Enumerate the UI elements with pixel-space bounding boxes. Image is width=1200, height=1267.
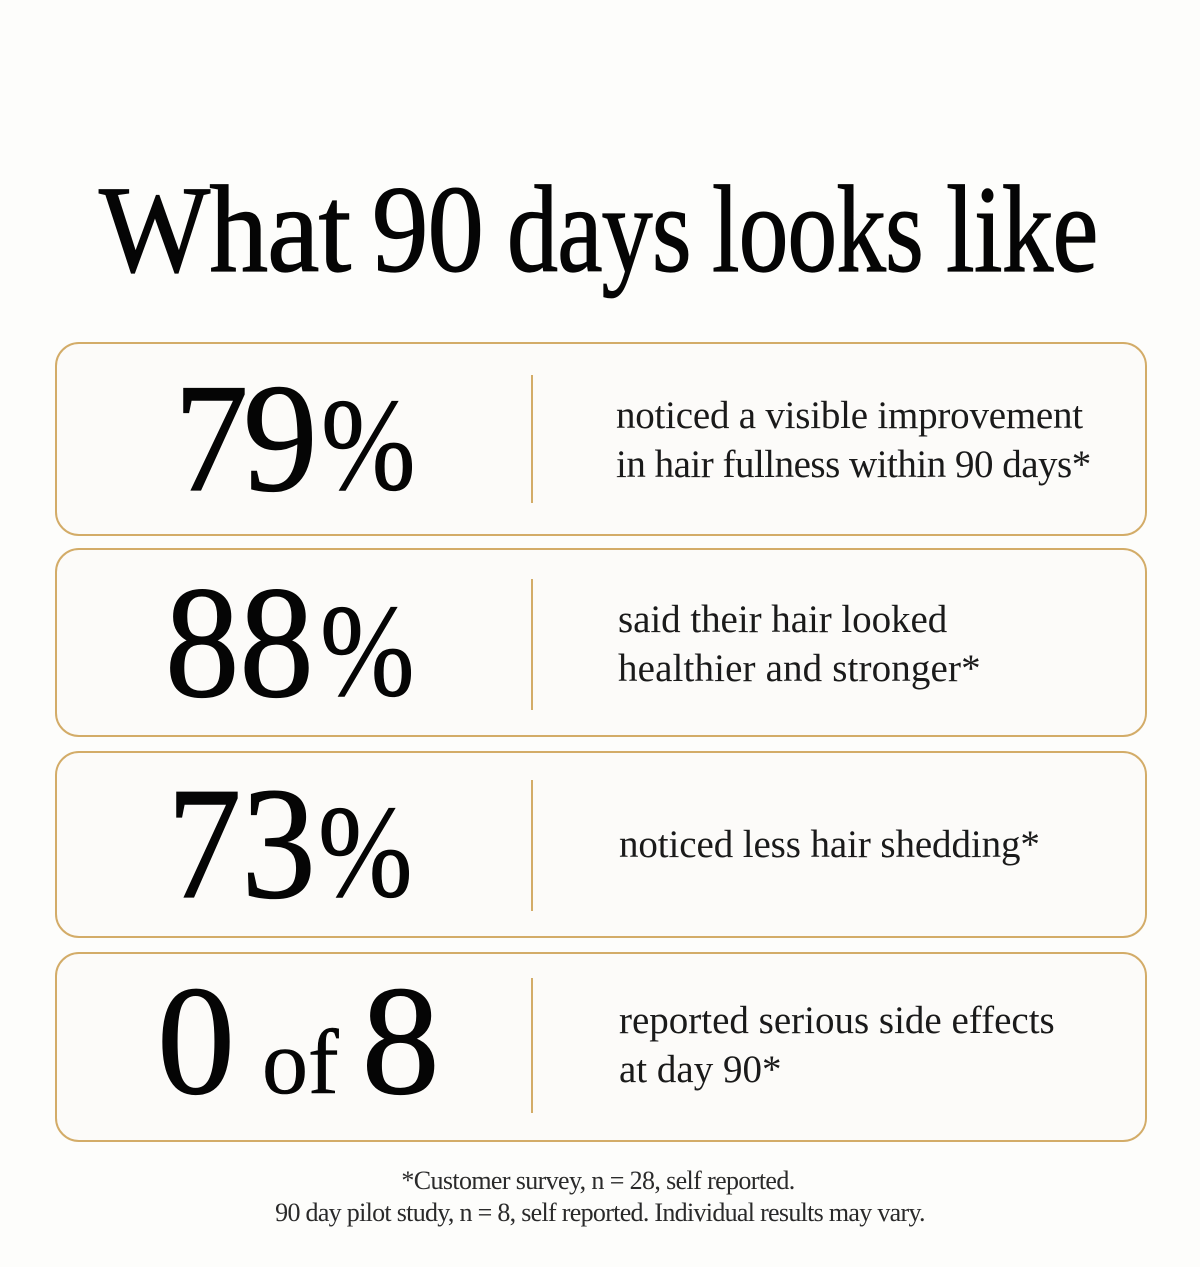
- title: [98, 161, 1098, 298]
- description: healthier: healthier and stronger*: [618, 647, 981, 690]
- footnote: [275, 1166, 925, 1227]
- description: fullness: [616, 394, 1091, 486]
- title: days: [507, 161, 691, 298]
- title: like: [946, 161, 1098, 298]
- panel: 88% stat: [55, 548, 1147, 737]
- description: side effects: [619, 999, 1055, 1091]
- panel: 79% stat: [55, 342, 1147, 536]
- stat: 79%: [174, 352, 416, 524]
- description: healthier: said their hair looked: [618, 598, 947, 641]
- title: 90: [372, 161, 483, 298]
- footnote: 90 day pilot study, n = 8, self reported. Individual results may vary.: [275, 1198, 925, 1227]
- stat: 73%: [167, 754, 413, 932]
- title: looks: [712, 161, 923, 298]
- stat: 0 of 8: 0 of8: [157, 954, 440, 1127]
- description: fullness: in hair fullness within 90 days*: [616, 443, 1091, 486]
- panel: 0 of 8 stat: [55, 952, 1147, 1142]
- stat: 88%: [165, 553, 415, 731]
- stat: 88%: %: [320, 577, 415, 724]
- panel: 73% stat: [55, 751, 1147, 938]
- description: fullness: noticed a visible improvement: [616, 394, 1083, 437]
- description: healthier: [618, 598, 981, 690]
- stat: 79%: %: [321, 371, 416, 518]
- footnote: *Customer survey, n = 28, self reported.: [401, 1166, 795, 1195]
- stat: 88%: 88: [165, 553, 314, 731]
- stat: 79%: 79: [174, 352, 312, 524]
- title: What: [99, 161, 350, 298]
- description: shedding: noticed less hair shedding*: [619, 823, 1040, 866]
- description: side effects: at day 90*: [619, 1048, 781, 1091]
- stat: 73%: 73: [167, 754, 316, 932]
- description: side effects: reported serious side effects: [619, 999, 1055, 1042]
- stat: 73%: %: [318, 778, 413, 925]
